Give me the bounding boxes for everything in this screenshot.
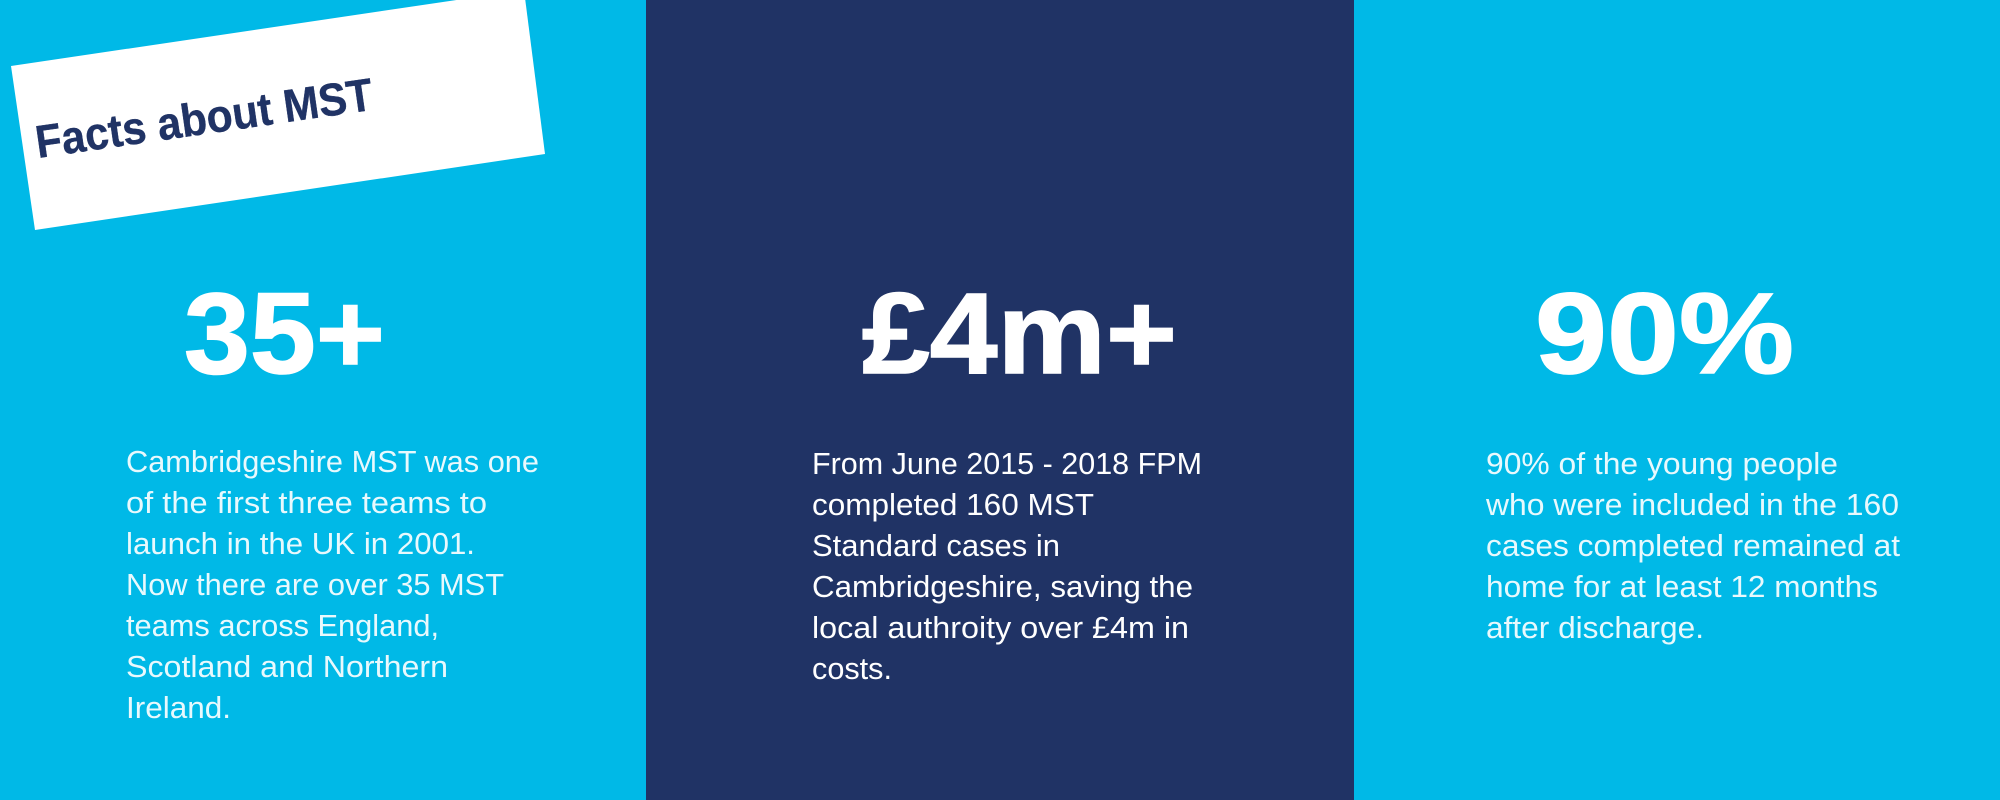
title: Facts about MST	[32, 68, 376, 168]
text block: Cambridgeshire teams: teams across England,	[126, 609, 439, 643]
stat: £4m+: £4m+	[862, 270, 1177, 398]
text block: remained at home: who were included in the 160	[1485, 488, 1899, 522]
stat: 90%: 90%	[1535, 270, 1794, 398]
text block: Cambridgeshire teams: Ireland.	[126, 691, 231, 725]
panel: left cyan background	[0, 0, 646, 800]
text block: FPM savings: costs.	[812, 652, 892, 686]
text block: FPM savings	[812, 447, 1202, 686]
text block: Cambridgeshire teams: of the first three teams to	[126, 486, 487, 520]
text block: remained at home: 90% of the young people	[1486, 447, 1838, 481]
panel: right cyan background	[1354, 0, 2000, 800]
text block: remained at home: cases completed remained at	[1486, 529, 1901, 563]
text block: remained at home: home for at least 12 months	[1486, 570, 1878, 604]
text block: FPM savings: Cambridgeshire, saving the	[812, 570, 1193, 604]
text block: Cambridgeshire teams: launch in the UK in 2001.	[126, 527, 475, 561]
text block: FPM savings: completed 160 MST	[812, 488, 1094, 522]
text block: Cambridgeshire teams	[126, 445, 539, 725]
text block: Cambridgeshire teams: Now there are over 35 MST	[126, 568, 504, 602]
text block: FPM savings: From June 2015 - 2018 FPM	[812, 447, 1202, 481]
text block: remained at home	[1485, 447, 1901, 645]
title banner	[11, 0, 545, 230]
text block: remained at home: after discharge.	[1486, 611, 1704, 645]
text block: Cambridgeshire teams: Scotland and Northern	[126, 650, 448, 684]
text block: FPM savings: local authroity over £4m in	[812, 611, 1189, 645]
text block: FPM savings: Standard cases in	[812, 529, 1060, 563]
panel: centre navy background	[646, 0, 1354, 800]
stat: 35+: 35+	[184, 270, 385, 398]
text block: Cambridgeshire teams: Cambridgeshire MST was one	[126, 445, 539, 479]
